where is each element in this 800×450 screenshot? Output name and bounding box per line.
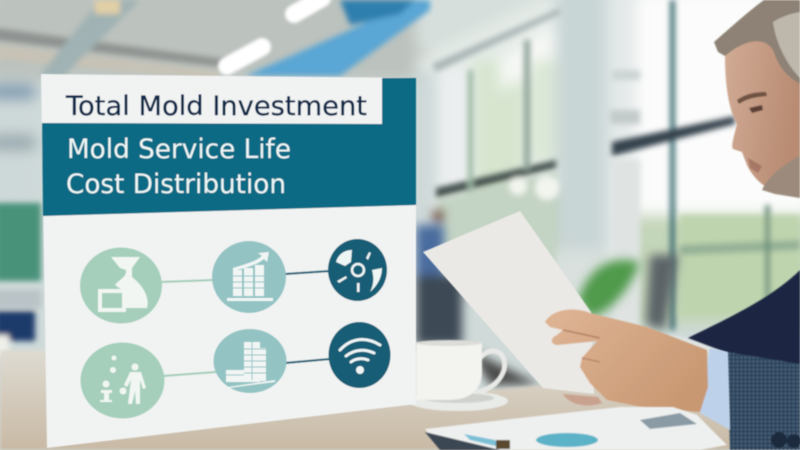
subtitle: Mold Service Life Cost Distribution: Mold Service Life (67, 134, 291, 165)
panel: teal header band (42, 78, 416, 216)
icon: money bag and box (80, 248, 162, 324)
icon: city buildings (214, 329, 286, 393)
coffee cup on saucer (408, 340, 508, 411)
man: hand and shirt cuff (545, 310, 730, 430)
icon: radial fan (328, 239, 387, 301)
table top (0, 335, 800, 450)
ceiling lights (227, 0, 322, 66)
icon: rising bar chart (212, 241, 286, 313)
reading paper (423, 211, 594, 394)
title: Total Mold Investment: Total Mold Investment (65, 91, 367, 122)
subtitle: Mold Service Life Cost Distribution (66, 134, 291, 200)
man: head and hair (714, 0, 800, 198)
panel: cost distribution card (41, 74, 416, 448)
subtitle: Mold Service Life Cost Distribution: Cost Distribution (66, 169, 286, 200)
icon: people and sparks (80, 342, 164, 418)
clipboard report (425, 407, 727, 450)
icon: wifi signal (328, 322, 390, 388)
connector: bottom row lines (163, 359, 330, 376)
man: suit and sleeve (688, 270, 800, 450)
connector: top row lines (160, 271, 330, 282)
